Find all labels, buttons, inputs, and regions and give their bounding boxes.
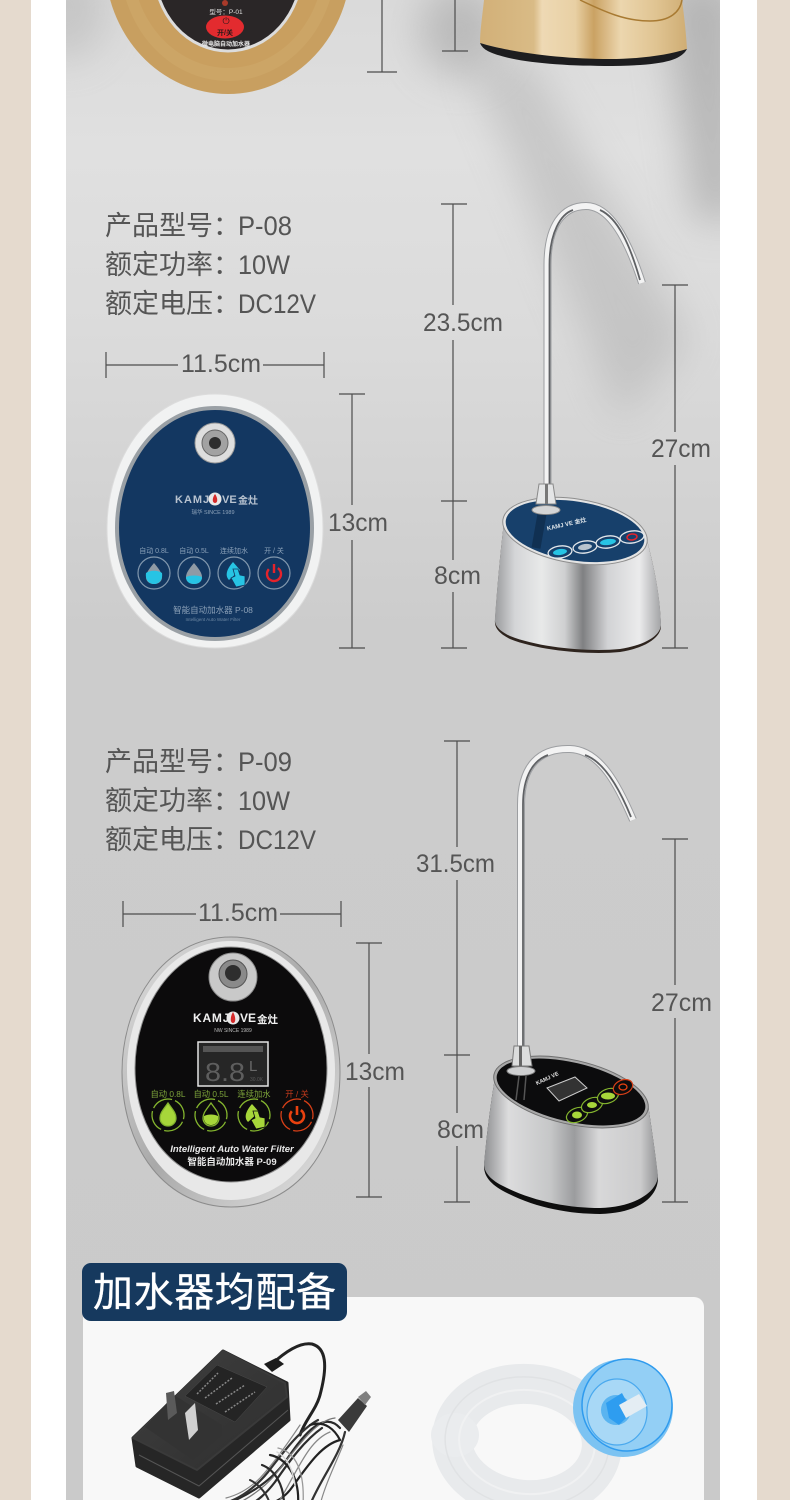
LCD display P-09: 30.0K	[250, 1077, 264, 1083]
button labels P-09: 自动 0.8L	[150, 1089, 186, 1099]
button labels P-08: 连续加水	[220, 546, 248, 555]
base body P-08	[495, 522, 661, 653]
total height dimension: 27cm P-09	[651, 839, 712, 1202]
width dimension: 11.5cm P-09	[123, 899, 341, 927]
cropped product: gold top plate: ⏻	[222, 16, 230, 26]
LCD display P-09: L	[249, 1058, 257, 1075]
brand logo P-08: VE	[222, 494, 237, 506]
spec text: P-08	[105, 211, 316, 319]
adapter prong base	[145, 1395, 222, 1460]
total height dimension: 27cm P-08	[651, 285, 711, 648]
height dimension: 13cm P-08	[328, 394, 388, 648]
top plate P-08	[107, 394, 323, 648]
cropped product: gold top plate: 微电脑自动加水器	[202, 40, 250, 48]
brand logo P-08	[175, 492, 258, 516]
brand logo P-08: KAMJ	[175, 494, 210, 506]
accessories panel	[83, 1297, 704, 1500]
button labels P-09: 开 / 关	[285, 1089, 309, 1099]
icon: silicone tube with suction cup	[431, 1359, 673, 1500]
gooseneck P-08	[548, 206, 642, 490]
width dimension: 11.5cm P-08	[106, 350, 324, 378]
cropped product: gold base	[480, 0, 687, 66]
LCD on base P-09	[547, 1077, 587, 1101]
product P-08: faucet and base	[495, 206, 661, 653]
LCD display P-09: 8.8	[205, 1057, 245, 1087]
button labels P-09: 连续加水	[237, 1089, 271, 1099]
spec text: P-08: 10W	[238, 250, 290, 280]
height dimension: 13cm P-08: 13cm	[328, 509, 388, 537]
cropped product: gold top plate: 型号：P-01	[209, 7, 243, 16]
button labels P-09	[150, 1089, 309, 1099]
width dimension: 11.5cm P-08: 11.5cm	[181, 350, 261, 378]
height dimensions: 23.5cm and 8cm P-08	[423, 204, 503, 648]
height dimensions: 31.5cm and 8cm P-09: 31.5cm	[416, 850, 495, 878]
icon: power adapter	[133, 1344, 371, 1500]
spec text: P-09: P-09	[238, 747, 292, 777]
control buttons P-09	[564, 1077, 635, 1126]
model text P-08: 智能自动加水器 P-08	[173, 605, 253, 615]
product P-08: faucet and base: KAMJ VE 金灶	[546, 516, 587, 532]
heading: 加水器均配备	[82, 1263, 347, 1321]
button labels P-08: 自动 0.8L	[139, 546, 169, 555]
base body P-09	[484, 1072, 658, 1214]
product P-09: faucet and base: KAMJ VE	[535, 1071, 560, 1087]
adapter label plate	[185, 1365, 267, 1422]
LCD display P-09	[198, 1042, 268, 1087]
spec text: P-09: 额定电压：	[105, 825, 240, 855]
model text P-09: 智能自动加水器 P-09	[187, 1156, 277, 1168]
button labels P-08	[139, 546, 284, 555]
total height dimension: 27cm P-09: 27cm	[651, 989, 712, 1017]
dimension lines: cropped gold product	[367, 0, 468, 72]
brand logo P-09	[193, 1011, 278, 1034]
height dimensions: 23.5cm and 8cm P-08: 8cm	[434, 562, 481, 590]
brand logo P-08: 金灶	[238, 494, 258, 507]
height dimensions: 31.5cm and 8cm P-09	[416, 741, 495, 1202]
button labels P-08: 自动 0.5L	[179, 546, 209, 555]
gooseneck P-09	[521, 749, 633, 1050]
height dimension: 13cm P-09	[345, 943, 405, 1197]
spec text: P-08: 额定功率：	[105, 250, 240, 280]
cropped product: gold top plate	[105, 0, 351, 94]
buttons P-09	[147, 1094, 318, 1136]
spec text: P-08: DC12V	[238, 289, 316, 319]
brand logo P-09: VE	[240, 1011, 256, 1025]
spec text: P-09: DC12V	[238, 825, 316, 855]
adapter housing	[133, 1351, 289, 1497]
width dimension: 11.5cm P-09: 11.5cm	[198, 899, 278, 927]
product P-09: faucet and base	[484, 749, 658, 1214]
adapter cord and coil	[222, 1344, 345, 1500]
model text P-09	[170, 1144, 295, 1168]
brand logo P-09: KAMJ	[193, 1011, 230, 1025]
brand logo P-09: NW SINCE 1989	[214, 1028, 252, 1034]
height dimensions: 31.5cm and 8cm P-09: 8cm	[437, 1116, 484, 1144]
buttons P-08	[138, 557, 290, 589]
spec text: P-09: 额定功率：	[105, 786, 240, 816]
water nipple P-09	[209, 953, 257, 1001]
spec text: P-08: P-08	[238, 211, 292, 241]
cropped product: gold top plate: 开/关	[217, 28, 233, 37]
brand logo P-08: 瑞华 SINCE 1989	[191, 508, 235, 516]
spec text: P-09: 产品型号：	[105, 747, 240, 777]
total height dimension: 27cm P-08: 27cm	[651, 435, 711, 463]
water nipple P-08	[195, 423, 235, 463]
spec text: P-09: 10W	[238, 786, 290, 816]
adapter DC connector	[338, 1398, 367, 1432]
spec text: P-09	[105, 747, 316, 855]
spec text: P-08: 产品型号：	[105, 211, 240, 241]
height dimensions: 23.5cm and 8cm P-08: 23.5cm	[423, 309, 503, 337]
heading: 加水器均配备: 加水器均配备	[93, 1271, 336, 1315]
spec text: P-08: 额定电压：	[105, 289, 240, 319]
tilted control top P-08	[498, 488, 652, 574]
button labels P-09: 自动 0.5L	[193, 1089, 229, 1099]
model text P-08	[173, 605, 253, 622]
button labels P-08: 开 / 关	[264, 546, 284, 555]
control buttons P-08	[547, 529, 645, 560]
suction cup	[573, 1359, 673, 1457]
brand logo P-09: 金灶	[257, 1013, 278, 1026]
model text P-08: Intelligent Auto Water Filter	[186, 617, 241, 622]
tilted control top P-09	[487, 1043, 655, 1141]
model text P-09: Intelligent Auto Water Filter	[170, 1144, 295, 1155]
top plate P-09	[122, 937, 340, 1207]
height dimension: 13cm P-09: 13cm	[345, 1058, 405, 1086]
